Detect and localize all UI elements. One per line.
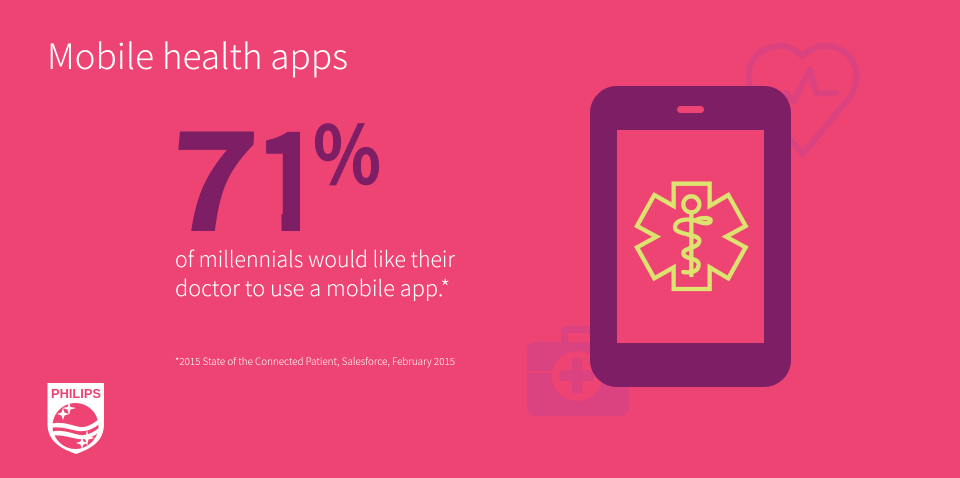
Philips logo — [48, 383, 104, 454]
icon: faint medical kit — [527, 326, 629, 416]
kit body — [527, 342, 629, 416]
icon: faint heart with pulse — [749, 46, 856, 154]
wordmark: PHILIPS — [51, 386, 101, 401]
icon: star of life with rod of Asclepius — [637, 184, 746, 289]
phone — [590, 86, 791, 387]
number 71: 1 — [253, 72, 326, 271]
footnote source: *2015 State of the Connected Patient, Salesforce, February 2015 — [175, 353, 455, 368]
phone speaker — [677, 106, 704, 113]
description line 1: of millennials would like their — [175, 242, 455, 274]
percent sign: % — [313, 92, 381, 208]
infographic canvas — [48, 41, 860, 454]
shield — [48, 383, 104, 454]
rod top circle — [683, 196, 699, 212]
title: Mobile health apps — [47, 29, 348, 80]
description text — [175, 242, 455, 303]
phone screen — [617, 130, 764, 343]
number 71: 7 — [161, 73, 266, 271]
kit handle — [561, 326, 606, 342]
phone body — [590, 86, 791, 387]
statistic: 71% — [178, 123, 380, 231]
kit seam — [527, 372, 629, 373]
globe — [52, 403, 98, 449]
snake — [675, 218, 711, 272]
stars — [57, 402, 95, 449]
star outline — [637, 184, 746, 289]
number 71 — [178, 132, 300, 231]
kit circle — [552, 351, 602, 401]
kit cross — [559, 358, 594, 393]
rod staff — [685, 212, 698, 277]
waves — [50, 416, 102, 439]
description line 2: doctor to use a mobile app.* — [175, 271, 450, 303]
